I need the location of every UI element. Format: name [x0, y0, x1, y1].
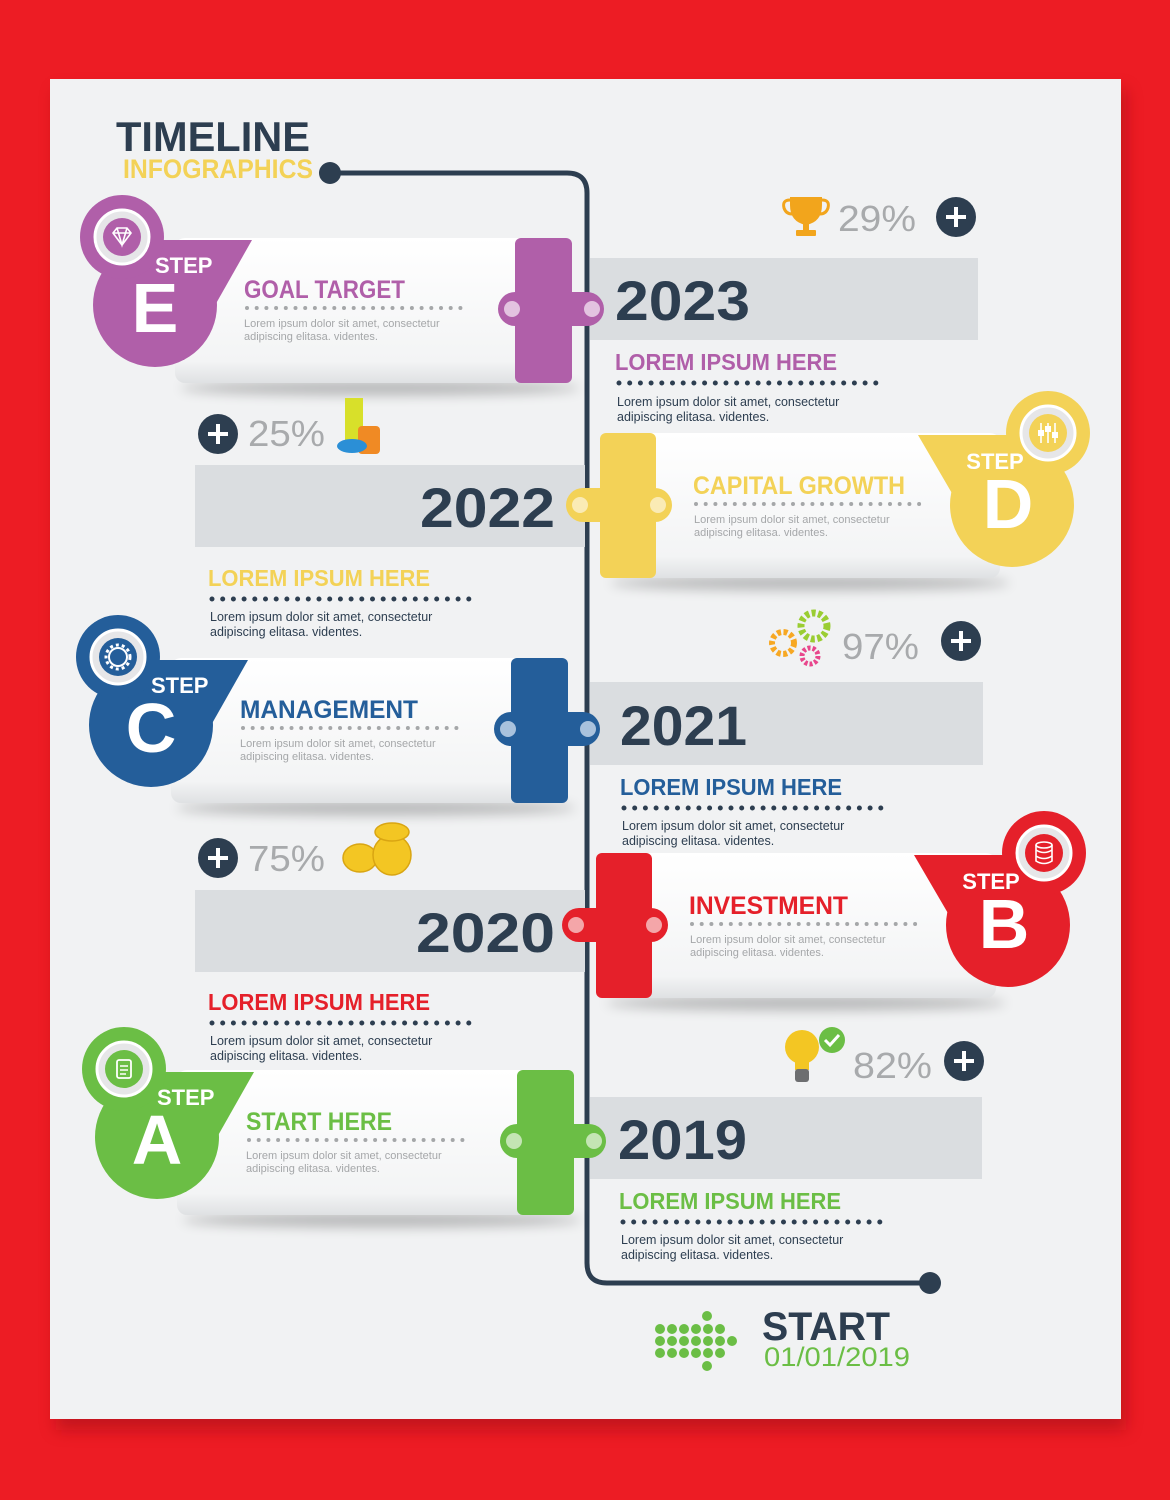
text block: 2020: Lorem ipsum dolor sit amet, consectetur [210, 1034, 432, 1048]
card: step E goal target: E [132, 269, 178, 347]
text block: 2020 [208, 989, 469, 1063]
text block: 2022: Lorem ipsum dolor sit amet, consectetur [210, 610, 432, 624]
text block: 2020: LOREM IPSUM HERE [208, 989, 430, 1015]
text block: 2022 [208, 565, 469, 639]
connector: B [562, 853, 668, 998]
text block: 2021: Lorem ipsum dolor sit amet, consectetur [622, 819, 844, 833]
stat: 29% [784, 197, 976, 239]
connector: C [494, 658, 600, 803]
card: step B investment: INVESTMENT [689, 892, 848, 920]
card: step B investment: STEP [962, 869, 1020, 894]
card: step A start here: A [132, 1101, 182, 1179]
stat: 25% [198, 398, 380, 454]
stat: 97% [772, 613, 981, 667]
year bar: 2023: 2023 [615, 269, 750, 332]
text block: 2021: adipiscing elitasa. videntes. [622, 834, 774, 848]
icon: sliders [1029, 414, 1067, 452]
text block: 2019: LOREM IPSUM HERE [619, 1188, 841, 1214]
card: step A start here: START HERE [246, 1108, 392, 1136]
stat: 75% [198, 823, 411, 879]
year bar: 2023 [590, 258, 978, 340]
card: step C management [76, 615, 600, 815]
text block: 2021: LOREM IPSUM HERE [620, 774, 842, 800]
icon: diamond [103, 218, 141, 256]
icon: clipboard [105, 1050, 143, 1088]
title: INFOGRAPHICS [123, 154, 313, 184]
stat: 97%: 97% [842, 626, 919, 667]
icon: 3d chart [337, 398, 380, 454]
card: step B investment: adipiscing elitasa. videntes. [690, 947, 824, 959]
start label: START [762, 1305, 890, 1349]
text block: 2019: adipiscing elitasa. videntes. [621, 1248, 773, 1262]
card: step D capital growth: D [983, 465, 1033, 543]
connector: D [566, 433, 672, 578]
icon: trophy [784, 197, 828, 236]
stat: 29%: 29% [838, 198, 916, 239]
stat: 75%: 75% [248, 838, 325, 879]
card: step E goal target [80, 195, 604, 395]
card: step B investment: B [979, 885, 1029, 963]
year bar: 2022: 2022 [420, 476, 555, 539]
year bar: 2019 [590, 1097, 982, 1179]
icon: database [1025, 834, 1063, 872]
icon: dotted arrow [655, 1311, 737, 1371]
stat: 82%: 82% [853, 1045, 932, 1086]
text block: 2022: LOREM IPSUM HERE [208, 565, 430, 591]
card: step E goal target: GOAL TARGET [244, 276, 405, 304]
card: step D capital growth: Lorem ipsum dolor sit amet, consectetur [694, 514, 890, 526]
year bar: 2020: 2020 [416, 901, 555, 964]
connector: A [500, 1070, 606, 1215]
card: step C management: STEP [151, 673, 208, 698]
stat: 82% [785, 1027, 984, 1086]
card: step A start here [82, 1027, 606, 1227]
text block: 2023: adipiscing elitasa. videntes. [617, 410, 769, 424]
text block: 2020: adipiscing elitasa. videntes. [210, 1049, 362, 1063]
card: step B investment: Lorem ipsum dolor sit amet, consectetur [690, 934, 886, 946]
icon: gears [772, 613, 827, 664]
icon: light bulb [785, 1027, 845, 1082]
icon: coins [343, 823, 411, 875]
card: step C management: adipiscing elitasa. videntes. [240, 751, 374, 763]
card: step E goal target: STEP [155, 253, 212, 278]
connector: E [498, 238, 604, 383]
card: step A start here: Lorem ipsum dolor sit amet, consectetur [246, 1150, 442, 1162]
year bar: 2020 [195, 890, 585, 972]
icon: gear [99, 638, 137, 676]
text block: 2023: Lorem ipsum dolor sit amet, consectetur [617, 395, 839, 409]
text block: 2019 [619, 1188, 880, 1262]
card: step C management: MANAGEMENT [240, 696, 418, 724]
card: step D capital growth: STEP [966, 449, 1024, 474]
card: step C management: Lorem ipsum dolor sit amet, consectetur [240, 738, 436, 750]
card: step D capital growth: adipiscing elitasa. videntes. [694, 527, 828, 539]
card: step E goal target: adipiscing elitasa. videntes. [244, 331, 378, 343]
card: step B investment [562, 811, 1086, 1010]
card: step D capital growth: CAPITAL GROWTH [693, 472, 905, 500]
year bar: 2021 [590, 682, 983, 765]
timeline line [319, 162, 941, 1294]
card: step C management: C [126, 689, 176, 767]
year bar: 2022 [195, 465, 585, 547]
year bar: 2019: 2019 [618, 1108, 747, 1171]
year bar: 2021: 2021 [620, 694, 747, 757]
start label: 01/01/2019 [764, 1342, 910, 1372]
text block: 2022: adipiscing elitasa. videntes. [210, 625, 362, 639]
start label [762, 1305, 910, 1372]
text block: 2019: Lorem ipsum dolor sit amet, consectetur [621, 1233, 843, 1247]
title: TIMELINE [116, 113, 310, 160]
stat: 25%: 25% [248, 413, 325, 454]
card: step A start here: adipiscing elitasa. videntes. [246, 1163, 380, 1175]
card: step E goal target: Lorem ipsum dolor sit amet, consectetur [244, 318, 440, 330]
text block: 2021 [620, 774, 881, 848]
text block: 2023: LOREM IPSUM HERE [615, 349, 837, 375]
text block: 2023 [615, 349, 876, 424]
title [116, 113, 313, 184]
card: step A start here: STEP [157, 1085, 214, 1110]
card: step D capital growth [566, 391, 1090, 590]
